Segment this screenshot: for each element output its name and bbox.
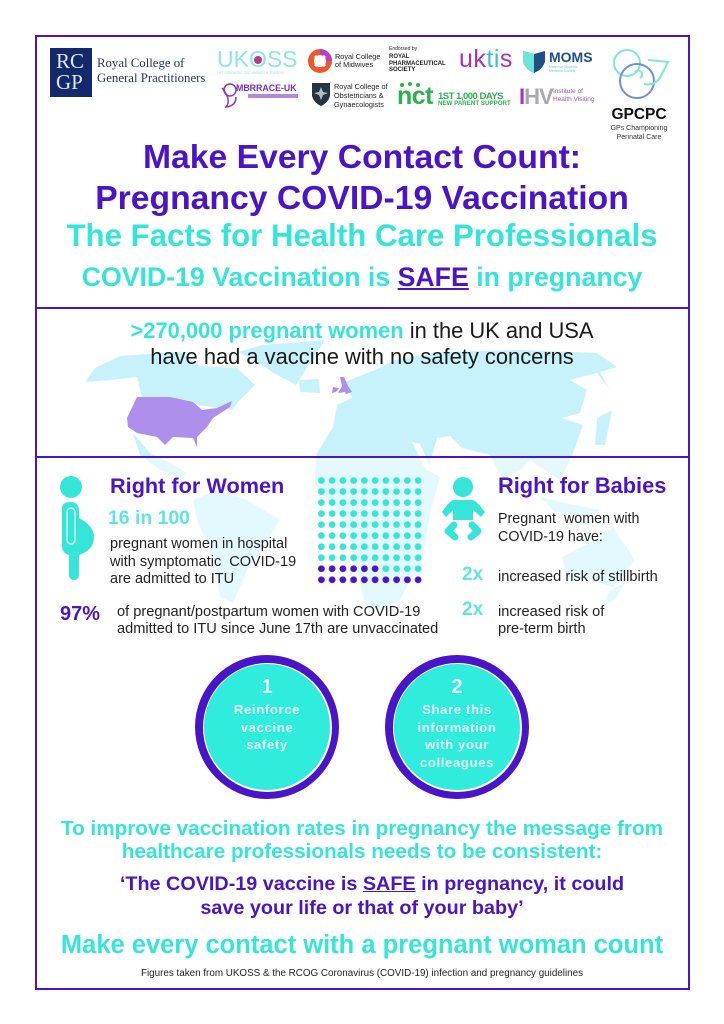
logo: UKOSS: UKOSS	[217, 46, 298, 72]
description: stillbirth: increased risk of stillbirth	[498, 569, 658, 585]
statistic: 2x stillbirth: 2x	[462, 564, 483, 585]
logo: UKOSS: UK Obstetric Surveillance System	[217, 70, 285, 75]
description: Pregnant women with	[498, 511, 639, 527]
logo: MBRRACE-UK: MBRRACE-UK	[236, 83, 297, 93]
UK highlighted	[332, 377, 352, 394]
logo: RCGP: RC	[56, 49, 84, 73]
logo: Institute of Health Visiting: IHV	[519, 84, 553, 109]
callout circle 2: information	[417, 720, 497, 735]
logo: Royal College of Obstetricians and Gynaecologists: Obstetricians &	[334, 91, 383, 100]
description: pregnant women in hospital	[110, 536, 287, 552]
logo: MOMS	[523, 49, 593, 73]
safety headline: COVID-19 Vaccination is SAFE in pregnancy	[82, 262, 642, 292]
logo: RCGP: Royal College of	[97, 56, 184, 70]
title	[95, 138, 629, 217]
logo: NCT 1st 1,000 days: nct	[397, 82, 433, 110]
logo: UKTIS: uktis	[459, 45, 513, 73]
description: 97%: of pregnant/postpartum women with COVID-19	[117, 604, 420, 620]
quote	[120, 873, 624, 919]
description: are admitted to ITU	[110, 571, 234, 587]
logo: RCGP	[50, 48, 205, 97]
heading: right for women: Right for Women	[110, 473, 284, 498]
logo: GPCPC: GPs Championing	[611, 125, 667, 132]
panel: right for women	[60, 473, 438, 637]
callout circle 1: vaccine	[241, 720, 293, 735]
logo: GPCPC	[611, 49, 670, 141]
divider 2	[36, 456, 688, 458]
logo: MOMS: MOMS	[549, 49, 593, 65]
message text: To improve vaccination rates in pregnancy the message from	[61, 817, 663, 840]
callout circle 2	[385, 655, 529, 799]
logo: Institute of Health Visiting: Institute of	[553, 88, 583, 95]
logo: GPCPC: GPCPC	[611, 106, 667, 123]
description: COVID-19 have:	[498, 528, 603, 544]
subtitle: The Facts for Health Care Professionals	[66, 218, 658, 253]
divider	[36, 306, 688, 309]
message text	[61, 817, 663, 863]
description: pre-term: increased risk of	[498, 604, 604, 620]
description	[498, 511, 639, 544]
chart: 16 in 100 dot grid	[318, 476, 422, 584]
logo: RCGP: General Practitioners	[97, 70, 205, 84]
callout circle 1: Reinforce	[234, 702, 300, 717]
statistic: 97%: 97%	[60, 603, 100, 625]
logo: Royal College of Midwives	[308, 49, 380, 73]
callout circle 2: 2	[451, 676, 463, 698]
logo: RCGP: GP	[56, 70, 83, 94]
description: 97%: admitted to ITU since June 17th are unvaccinated	[117, 621, 438, 637]
logo: Royal Pharmaceutical Society: PHARMACEUTICAL	[389, 60, 446, 66]
statistic: 16 in 100: 16 in 100	[108, 507, 190, 529]
logo: Royal College of Midwives: Royal College	[335, 52, 380, 61]
pale overlay for lower map	[36, 458, 688, 648]
logo: MOMS: Medicine Society	[549, 69, 575, 73]
logo: Royal Pharmaceutical Society	[389, 46, 446, 73]
quote: ‘The COVID-19 vaccine is SAFE in pregnancy, it could	[120, 873, 624, 895]
logo: Royal Pharmaceutical Society: ROYAL	[389, 54, 409, 60]
logo: Royal Pharmaceutical Society: Endorsed by	[389, 46, 417, 52]
callout circle 1: safety	[246, 737, 288, 752]
call to action: Make every contact with a pregnant woman count	[61, 931, 663, 959]
statistic: 2x pre-term: 2x	[462, 599, 483, 620]
statistic: vaccinated pregnant women: >270,000 pregnant women in the UK and USA	[131, 318, 593, 343]
logo: Royal College of Obstetricians and Gynaecologists: Gynaecologists	[334, 100, 384, 109]
callout circle 2: colleagues	[420, 755, 494, 770]
description: 97%	[117, 604, 438, 637]
logo: GPCPC: Perinatal Care	[617, 134, 661, 141]
panel: right for babies	[442, 473, 666, 637]
USA highlighted	[127, 397, 232, 447]
logo: NCT 1st 1,000 days	[397, 82, 511, 110]
logo: Royal College of Obstetricians and Gynaecologists: Royal College of	[334, 82, 388, 91]
callout circle 1	[195, 655, 339, 799]
statistic: vaccinated pregnant women: have had a vaccine with no safety concerns	[150, 344, 574, 369]
logo: NCT 1st 1,000 days: 1ST 1,000 DAYS	[438, 91, 503, 102]
logo: NCT 1st 1,000 days: NEW PARENT SUPPORT	[438, 100, 511, 107]
heading: right for babies: Right for Babies	[498, 473, 666, 498]
message text: healthcare professionals needs to be consistent:	[122, 840, 602, 863]
description	[110, 536, 296, 587]
quote: save your life or that of your baby’	[200, 897, 524, 919]
icon: pregnant woman	[60, 476, 94, 580]
statistic: vaccinated pregnant women	[131, 318, 594, 369]
callout circle 1: 1	[261, 676, 273, 698]
logo: MBRRACE-UK	[222, 83, 298, 108]
title: Make Every Contact Count:	[143, 138, 581, 176]
description: with symptomatic COVID-19	[110, 554, 296, 570]
description: pre-term	[498, 604, 604, 637]
logo: Institute of Health Visiting: Health Visiting	[553, 96, 594, 102]
logo: Royal College of Obstetricians and Gynaecologists	[312, 82, 388, 109]
source note: Figures taken from UKOSS & the RCOG Coronavirus (COVID-19) infection and pregnancy guidelines	[141, 968, 583, 979]
callout circle 2: Share this	[422, 702, 492, 717]
icon: baby	[442, 477, 485, 540]
logo: Royal College of Midwives: of Midwives	[335, 60, 373, 69]
logo: MOMS: Maternal Obstetric	[549, 65, 578, 69]
logo: Institute of Health Visiting	[519, 84, 594, 109]
title: Pregnancy COVID-19 Vaccination	[95, 179, 629, 217]
logo: Royal Pharmaceutical Society: SOCIETY	[389, 67, 415, 73]
description: pre-term: pre-term birth	[498, 621, 586, 637]
callout circle 2: with your	[425, 737, 489, 752]
